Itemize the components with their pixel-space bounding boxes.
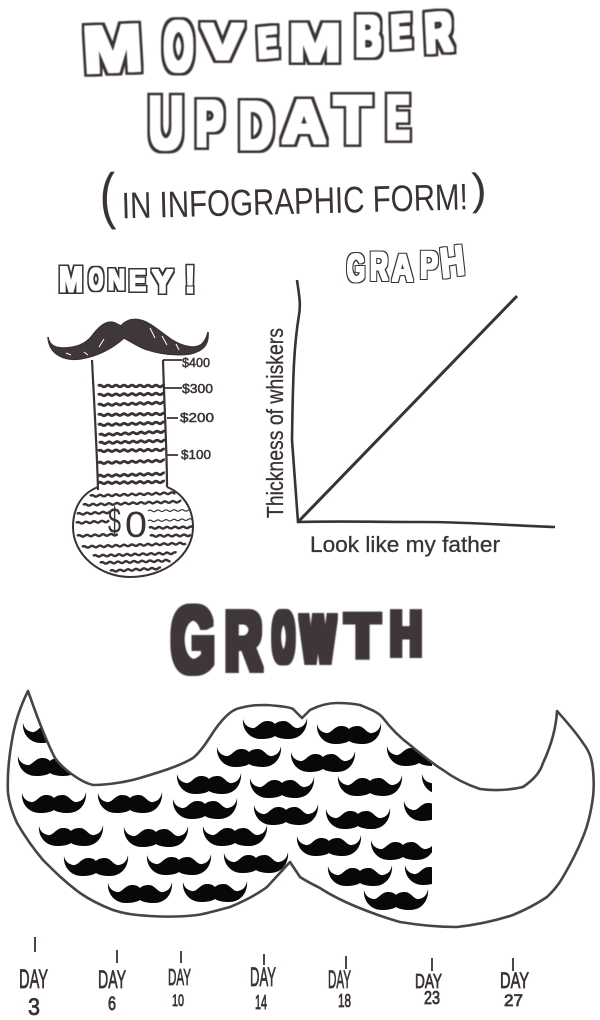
heading: growth: G	[171, 587, 215, 692]
scale labels: $200	[180, 410, 214, 425]
title: Movember: B	[356, 4, 381, 68]
day 6: 6	[108, 994, 116, 1015]
day 3: DAY	[19, 964, 48, 994]
heading: graph: P	[420, 245, 438, 287]
heading: money: E	[129, 266, 146, 298]
heading: graph: R	[370, 245, 388, 289]
title: Update: T	[334, 82, 371, 158]
trend line	[298, 296, 517, 522]
title: Movember: M	[81, 10, 145, 86]
title: Update: A	[282, 88, 326, 156]
thermometer bulb	[73, 487, 193, 577]
heading: growth: R	[225, 594, 262, 688]
heading: graph: H	[437, 237, 467, 287]
heading: growth: T	[345, 602, 380, 670]
x axis label: Look like my father	[310, 532, 500, 557]
day 14: 14	[255, 992, 267, 1014]
day 10: 10	[172, 991, 184, 1010]
thermometer tube	[92, 360, 167, 490]
subtitle: IN INFOGRAPHIC FORM!	[121, 176, 468, 226]
axes	[292, 280, 555, 527]
heading: graph: G	[347, 247, 365, 290]
heading: growth: W	[301, 602, 335, 677]
title: Movember: E	[256, 19, 279, 66]
tube hatching	[98, 385, 219, 484]
moustache cap	[48, 319, 208, 359]
growth moustache chart	[8, 691, 594, 927]
day 23: DAY	[415, 971, 442, 993]
heading: money: Y	[152, 264, 173, 300]
title: Update: P	[196, 88, 223, 160]
title: Movember: M	[289, 14, 341, 72]
bulb hatching	[76, 491, 270, 572]
day 23: 23	[424, 988, 440, 1008]
title: Movember: R	[423, 1, 454, 64]
panel: money thermometer	[48, 260, 270, 577]
day 27: DAY	[500, 968, 529, 993]
heading: graph: A	[392, 248, 413, 290]
heading: money: O	[89, 262, 103, 296]
day 27: 27	[504, 991, 523, 1010]
moustache pattern fill	[18, 718, 432, 910]
thermometer value: 0	[125, 504, 147, 545]
title: Update: U	[149, 82, 183, 164]
title: Update: D	[239, 88, 273, 164]
title: Movember: E	[390, 6, 411, 57]
day 6: DAY	[98, 966, 126, 994]
panel: graph	[262, 237, 555, 557]
scale ticks	[163, 360, 182, 455]
heading: money: N	[108, 264, 125, 296]
y axis label: Thickness of whiskers	[262, 328, 288, 518]
day 10: DAY	[168, 964, 191, 990]
heading: money: !	[185, 260, 195, 302]
heading: money: M	[59, 260, 83, 300]
thermometer value: $	[108, 500, 121, 541]
heading: growth: O	[273, 599, 294, 678]
title: Update: E	[387, 84, 409, 152]
title: Movember: V	[202, 16, 243, 70]
moustache outline	[8, 691, 594, 927]
timeline ticks	[35, 937, 513, 971]
heading: growth: H	[390, 600, 422, 669]
scale labels: $100	[181, 447, 211, 462]
timeline labels	[19, 962, 533, 1020]
subtitle: (	[99, 162, 117, 231]
day 18: 18	[338, 991, 351, 1011]
day 18: DAY	[328, 966, 351, 994]
subtitle: )	[471, 165, 487, 214]
title: Movember: O	[164, 8, 193, 86]
day 14: DAY	[250, 962, 276, 992]
scale labels: $400	[182, 355, 210, 370]
scale labels: $300	[182, 381, 213, 396]
